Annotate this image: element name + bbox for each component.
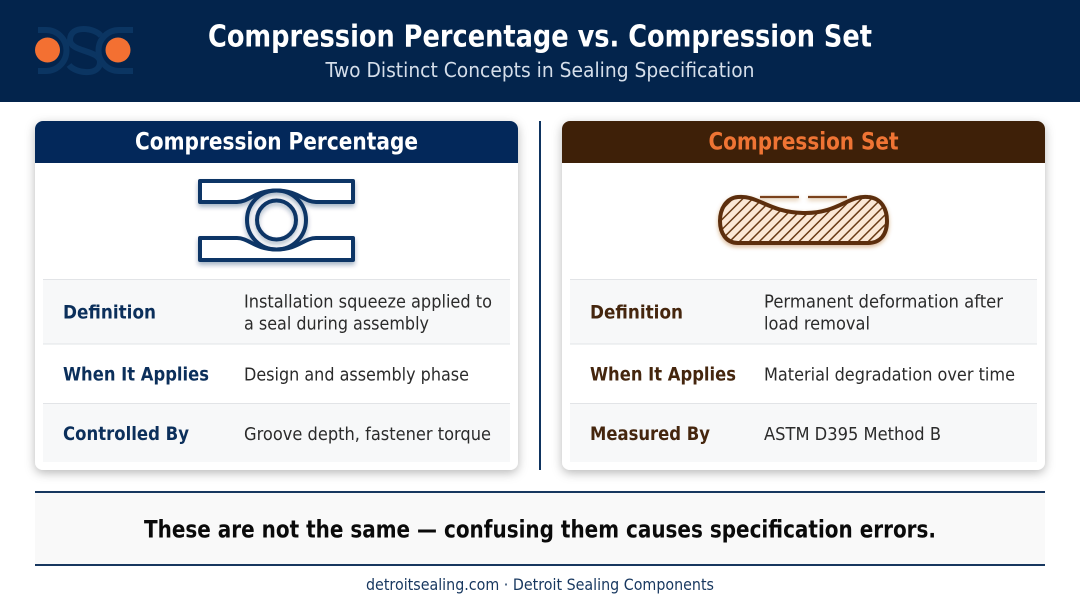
panel heading [35, 121, 518, 163]
row: definition: Definition [590, 302, 683, 324]
panel heading: Compression Set [708, 128, 898, 156]
panel: compression percentage [35, 121, 518, 470]
row: when it applies: When It Applies [63, 364, 209, 386]
callout [35, 491, 1045, 566]
row: definition [570, 279, 1037, 344]
row: when it applies [63, 364, 469, 386]
row: when it applies: Design and assembly phase [244, 366, 469, 386]
row: definition: load removal [764, 314, 870, 334]
panel: compression set [562, 121, 1045, 470]
row: definition: Installation squeeze applied to [244, 292, 492, 312]
header band [0, 0, 1080, 102]
logo: DSC mark [35, 29, 133, 72]
row: when it applies: Material degradation over time [764, 366, 1015, 386]
panel heading: Compression Percentage [135, 128, 418, 156]
row: when it applies: When It Applies [590, 364, 736, 386]
row: definition: Permanent deformation after [764, 292, 1004, 312]
icon: o-ring between plates [200, 181, 353, 260]
icon: deformed seal cross-section [720, 197, 887, 243]
title: Compression Percentage vs. Compression Set [208, 20, 872, 54]
row: measured by: Measured By [590, 423, 711, 445]
row: when it applies [590, 364, 1015, 386]
row: measured by: ASTM D395 Method B [764, 425, 941, 445]
row: measured by [570, 403, 1037, 462]
row: definition: Definition [63, 302, 156, 324]
panel heading [562, 121, 1045, 163]
row: controlled by: Controlled By [63, 423, 190, 445]
footer text: detroitsealing.com · Detroit Sealing Components [366, 575, 714, 594]
subtitle: Two Distinct Concepts in Sealing Specification [325, 58, 754, 82]
row: controlled by: Groove depth, fastener torque [244, 425, 491, 445]
row: definition [43, 279, 510, 344]
center divider [539, 121, 541, 470]
callout: These are not the same — confusing them causes specification errors. [144, 516, 936, 544]
row: definition: a seal during assembly [244, 314, 429, 334]
row: controlled by [43, 403, 510, 462]
